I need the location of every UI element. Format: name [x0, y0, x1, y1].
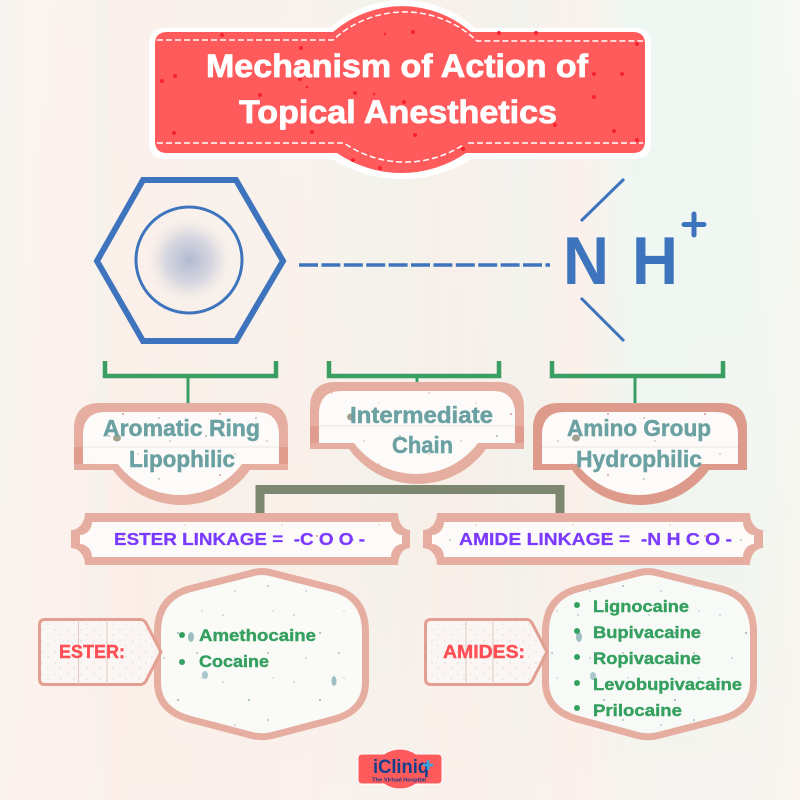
- amide drug list: Lignocaine: [593, 597, 689, 616]
- tag: ester: [40, 620, 161, 684]
- logo badge: [358, 749, 442, 789]
- inner circle: [136, 207, 242, 313]
- bracket: aromatic: [105, 361, 276, 403]
- amide linkage text: AMIDE LINKAGE = -N H C O -: [459, 529, 732, 549]
- panel: intermediate chain: [310, 382, 524, 484]
- banner speckles: [160, 30, 639, 170]
- amine bond upper: [581, 179, 624, 221]
- banner red body: [155, 6, 645, 173]
- amide drug list: Levobupivacaine: [593, 675, 742, 694]
- ester drug list: Amethocaine: [199, 626, 316, 645]
- tag: amides: [426, 620, 547, 684]
- ester linkage text: ESTER LINKAGE = -C O O -: [114, 529, 365, 549]
- aromatic ring hexagon: [97, 180, 283, 341]
- banner white outline: [149, 0, 651, 179]
- ester bullet marks: [179, 632, 185, 665]
- ester tag text: ESTER:: [59, 642, 125, 662]
- panel: ester drugs: [158, 572, 366, 737]
- logo wordmark: iCliniq: [373, 757, 429, 778]
- amino label: Amino Group: [567, 415, 711, 441]
- bracket: intermediate: [329, 361, 499, 382]
- title banner: [149, 0, 651, 179]
- amides tag text: AMIDES:: [443, 642, 525, 662]
- panel: aromatic ring: [74, 403, 288, 505]
- panel: amide linkage: [423, 513, 763, 565]
- molecule diagram: [97, 179, 704, 341]
- amine bond lower: [581, 298, 624, 341]
- logo tagline: The Virtual Hospital: [372, 778, 426, 784]
- bracket: amino: [552, 361, 723, 403]
- amino label: Hydrophilic: [576, 446, 702, 472]
- title text: Topical Anesthetics: [239, 94, 557, 130]
- banner top stitching: [157, 12, 643, 41]
- intermediate label: Intermediate: [350, 402, 493, 428]
- plus sign: [684, 214, 704, 235]
- dashed intermediate chain: [299, 263, 550, 267]
- panel: ester linkage: [71, 513, 410, 565]
- amide drug list: Bupivacaine: [593, 623, 701, 642]
- logo: iCliniq: [358, 749, 442, 789]
- blurred ring centre: [147, 218, 231, 302]
- N H label: H: [632, 223, 678, 299]
- aromatic label: Lipophilic: [129, 446, 235, 472]
- connector bracket: [260, 490, 560, 517]
- aromatic label: Aromatic Ring: [103, 415, 260, 441]
- panel: amino group: [533, 403, 747, 505]
- title text: Mechanism of Action of: [206, 48, 588, 84]
- banner bottom stitching: [157, 143, 643, 162]
- N H label: N: [563, 223, 609, 299]
- amide drug list: Ropivacaine: [593, 649, 701, 668]
- intermediate label: Chain: [392, 432, 453, 458]
- amide drug list: Prilocaine: [593, 701, 682, 720]
- ester drug list: Cocaine: [199, 652, 269, 671]
- amide bullet marks: [574, 602, 580, 711]
- logo plus: [423, 760, 433, 770]
- panel: amide drugs: [546, 572, 754, 737]
